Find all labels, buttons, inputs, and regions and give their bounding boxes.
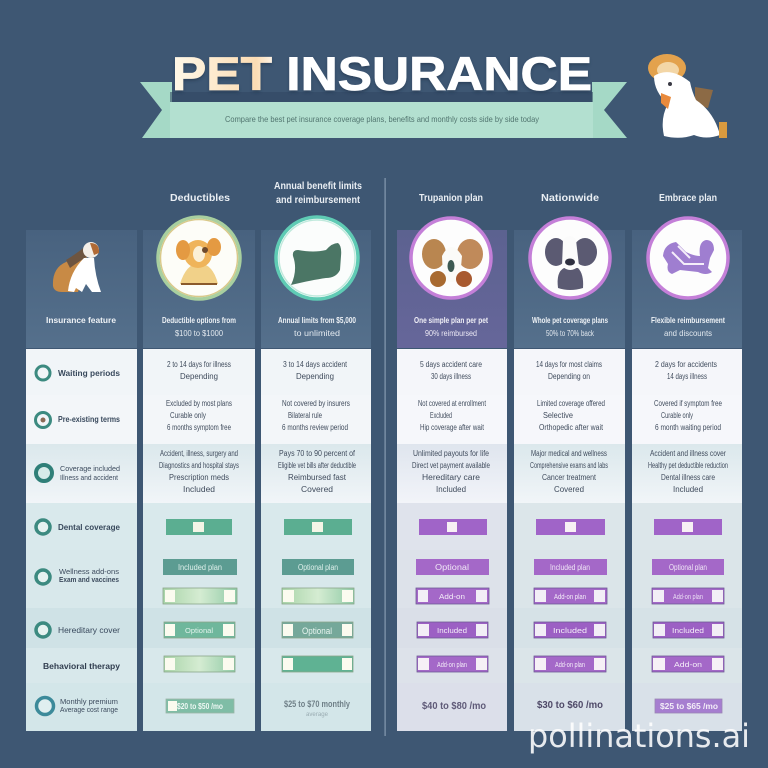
text: header: 50% to 70% back <box>546 328 595 338</box>
bar: row 6: Included <box>553 626 587 635</box>
label: row 2 <box>36 412 120 428</box>
bar: row 7: Add-on <box>674 660 702 669</box>
text: row 2 <box>418 399 487 432</box>
text: row 8: $40 to $80 /mo <box>422 701 486 712</box>
text: row 3: Covered <box>301 485 333 494</box>
text: row 1 <box>420 360 482 381</box>
text: row 2: Orthopedic after wait <box>539 423 604 432</box>
text: row 2: Curable only <box>170 411 206 420</box>
label: row 8 <box>36 697 118 714</box>
text: header: Annual limits from $5,000 <box>278 315 356 325</box>
text: row 8: average <box>306 712 329 718</box>
text: row 2: 6 months symptom free <box>167 423 231 432</box>
text: row 3: Unlimited payouts for life <box>413 449 489 458</box>
icon: teal badge <box>276 217 358 299</box>
label: row 5 <box>36 567 119 584</box>
text: header <box>162 315 236 338</box>
text: row 3: Pays 70 to 90 percent of <box>279 449 356 458</box>
text: row 3 <box>648 449 728 494</box>
bar: row 6 <box>164 622 235 638</box>
text: row 1: Depending <box>296 372 334 381</box>
column heading: annual benefit <box>274 181 362 206</box>
text: row 3: Prescription meds <box>169 473 229 482</box>
label: row 8: Monthly premium <box>60 697 118 706</box>
text: row 2: Not covered at enrollment <box>418 399 487 408</box>
text: row 3: Covered <box>554 485 584 494</box>
label: row 3: Coverage included <box>60 464 120 473</box>
label: row 2: Pre-existing terms <box>58 415 120 424</box>
bar: row 5 top: Included plan <box>178 563 222 572</box>
column heading: annual benefit: Annual benefit limits <box>274 181 362 192</box>
bar: row 8 <box>166 699 234 713</box>
bar: row 5 top: Included plan <box>550 563 590 572</box>
text: header: Flexible reimbursement <box>651 315 725 325</box>
text: header: One simple plan per pet <box>414 315 488 325</box>
column heading: provider 2: Nationwide <box>541 192 599 204</box>
text: row 2: Limited coverage offered <box>537 399 605 408</box>
text: row 1: 5 days accident care <box>420 360 482 369</box>
text: row 3: Included <box>183 485 215 494</box>
bar: row 7 <box>282 656 353 672</box>
panel: Trupanion column <box>397 218 507 731</box>
bar: row 6: Included <box>437 626 467 635</box>
text: row 3: Hereditary care <box>422 473 481 482</box>
icon: purple bone badge <box>648 218 728 298</box>
label: row 3 <box>36 464 120 482</box>
icon: sitting dog top right <box>648 54 727 138</box>
text: row 8: $25 to $70 monthly <box>284 699 350 709</box>
text: row 3: Included <box>673 485 703 494</box>
bar: row 5 top: Optional plan <box>669 563 707 572</box>
text: row 3: Diagnostics and hospital stays <box>159 461 239 470</box>
text: row 2: Curable only <box>661 411 693 420</box>
text: row 2: Selective <box>543 411 574 420</box>
label: row 5: Exam and vaccines <box>59 575 119 584</box>
text: row 1 <box>536 360 602 381</box>
title: PET INSURANCE <box>172 47 592 100</box>
bar: row 6: Included <box>672 626 704 635</box>
text: row 1: 14 days illness <box>667 372 707 381</box>
text: row 1: Depending <box>180 372 218 381</box>
label: row 8: Average cost range <box>60 705 118 714</box>
bar: row 4 <box>419 519 487 535</box>
text: header: to unlimited <box>294 328 340 338</box>
panel: Embrace column <box>632 218 742 731</box>
bar: row 8: $20 to $50 /mo <box>177 702 223 711</box>
text: row 3: Included <box>436 485 466 494</box>
text: row 1: 2 to 14 days for illness <box>167 360 231 369</box>
label: row 6: Hereditary cover <box>58 625 120 635</box>
text: row 3: Comprehensive exams and labs <box>530 461 608 470</box>
text: row 2: Hip coverage after wait <box>420 423 485 432</box>
panel: row labels <box>26 230 137 731</box>
bar: row 4 <box>166 519 232 535</box>
bar: row 8 <box>655 699 722 713</box>
panel: deductibles column <box>143 217 255 731</box>
icon: header dog <box>53 242 101 292</box>
text: row 1: 2 days for accidents <box>655 360 717 369</box>
bar: row 7 <box>652 656 724 672</box>
panel: Nationwide column <box>514 218 625 731</box>
bar: row 5 top <box>163 559 237 575</box>
bar: row 5 top: Optional plan <box>298 563 338 572</box>
bar: row 5 bottom <box>282 588 354 604</box>
text: header: Whole pet coverage plans <box>532 315 608 325</box>
bar: row 6: Optional <box>302 626 332 636</box>
text: header <box>651 315 725 338</box>
label: row 4 <box>36 520 121 534</box>
text: header <box>414 315 488 338</box>
bar: row 7: Add-on plan <box>555 662 585 669</box>
text: row 3: Reimbursed fast <box>288 473 347 482</box>
bar: row 5 bottom <box>163 588 237 604</box>
text: row 2: Covered if symptom free <box>654 399 722 408</box>
text: row 1 <box>655 360 717 381</box>
banner ribbon <box>140 82 627 138</box>
text: row 2: Not covered by insurers <box>282 399 350 408</box>
text: row 2 <box>537 399 605 432</box>
label: row 7: Behavioral therapy <box>43 661 120 671</box>
text: row 1: 14 days for most claims <box>536 360 602 369</box>
bar: row 7 <box>417 656 488 672</box>
column heading: provider 1: Trupanion plan <box>419 192 483 204</box>
label: row 1: Waiting periods <box>58 369 121 378</box>
text: row 2 <box>282 399 350 432</box>
bar: row 5 top <box>416 559 489 575</box>
text: row 2: Bilateral rule <box>288 411 322 420</box>
bar: row 5 top: Optional <box>435 563 469 572</box>
icon: grey dog badge <box>530 218 610 298</box>
text: header: $100 to $1000 <box>175 328 223 338</box>
text: row 3 <box>159 449 239 494</box>
label: row 1 <box>36 366 121 380</box>
text: row 2 <box>166 399 232 432</box>
watermark: pollinations.ai <box>528 717 750 755</box>
bar: row 6: Optional <box>185 628 213 635</box>
text: row 1: 30 days illness <box>431 372 471 381</box>
bar: row 5 top <box>534 559 607 575</box>
text: row 3: Direct vet payment available <box>412 461 490 470</box>
bar: row 7: Add-on plan <box>437 662 467 669</box>
text: row 3 <box>530 449 608 494</box>
text: header: Deductible options from <box>162 315 236 325</box>
text: row 3 <box>412 449 490 494</box>
text: row 2: 6 months review period <box>282 423 348 432</box>
icon: puppy badge <box>158 217 240 299</box>
text: row 3: Dental illness care <box>661 473 715 482</box>
text: row 3 <box>278 449 356 494</box>
text: row 1 <box>167 360 231 381</box>
bar: row 6 <box>282 622 353 638</box>
bar: row 4 <box>536 519 605 535</box>
text: header: 90% reimbursed <box>425 328 477 338</box>
text: row 2: Excluded by most plans <box>166 399 232 408</box>
bar: row 5 top <box>282 559 354 575</box>
bar: row 5 top <box>652 559 724 575</box>
bar: row 5 bottom: Add-on <box>439 594 465 601</box>
bar: row 5 bottom: Add-on plan <box>554 594 586 601</box>
bar: row 5 bottom: Add-on plan <box>673 594 703 601</box>
column heading: provider 3: Embrace plan <box>659 192 717 204</box>
text: header: and discounts <box>664 328 712 338</box>
text: row 1: Depending on <box>548 372 590 381</box>
label: row 6 <box>36 623 120 637</box>
label: row 4: Dental coverage <box>58 523 121 532</box>
label: header: Insurance feature <box>46 315 116 325</box>
bar: row 4 <box>654 519 722 535</box>
text: row 2 <box>654 399 722 432</box>
text: header <box>278 315 356 338</box>
subtitle: Compare the best pet insurance coverage plans, benefits and monthly costs side by side today <box>225 114 540 124</box>
bar: row 6 <box>534 622 606 638</box>
label: row 3: Illness and accident <box>60 473 119 482</box>
text: row 3: Healthy pet deductible reduction <box>648 461 728 470</box>
divider <box>384 178 386 736</box>
text: row 3: Accident, illness, surgery and <box>160 449 238 458</box>
text: row 3: Accident and illness cover <box>650 449 726 458</box>
text: row 1: 3 to 14 days accident <box>283 360 348 369</box>
column heading: deductibles: Deductibles <box>170 192 230 204</box>
bar: row 4 <box>284 519 352 535</box>
bar: row 7 <box>534 656 606 672</box>
text: row 2: 6 month waiting period <box>655 423 721 432</box>
bar: row 7 <box>164 656 235 672</box>
bar: row 6 <box>653 622 724 638</box>
text: row 8 <box>284 699 350 718</box>
bar: row 6 <box>417 622 488 638</box>
label: row 5: Wellness add-ons <box>59 567 119 576</box>
bar: row 5 bottom <box>416 588 489 604</box>
text: header <box>532 315 608 338</box>
column heading: annual benefit: and reimbursement <box>276 195 361 206</box>
bar: row 5 bottom <box>534 588 607 604</box>
panel: benefit column <box>261 217 371 731</box>
bar: row 5 bottom <box>652 588 724 604</box>
title: PET INSURANCE <box>172 49 592 102</box>
text: row 3: Eligible vet bills after deductible <box>278 461 356 470</box>
text: row 3: Major medical and wellness <box>531 449 607 458</box>
text: row 1 <box>283 360 348 381</box>
text: row 8: $30 to $60 /mo <box>537 700 603 711</box>
text: row 3: Cancer treatment <box>542 473 597 482</box>
bar: row 8: $25 to $65 /mo <box>660 701 718 711</box>
text: row 2: Excluded <box>430 411 452 420</box>
icon: brown spaniel badge <box>411 218 491 298</box>
